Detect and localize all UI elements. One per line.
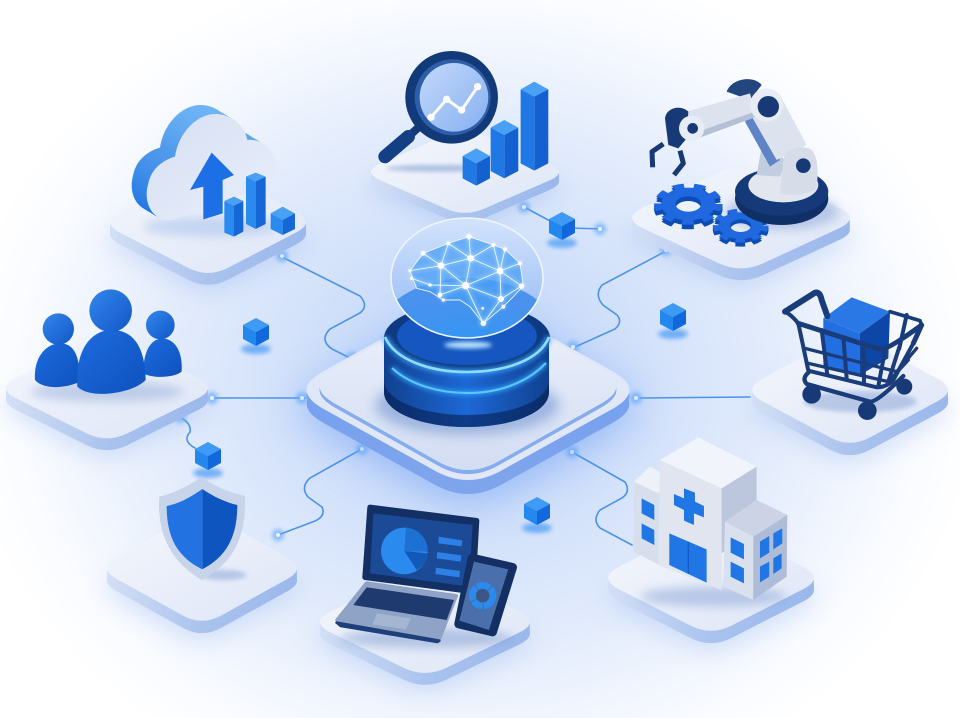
platform: robot [632, 168, 850, 287]
network brain [408, 234, 524, 326]
icon: laptop and tablet [337, 507, 513, 648]
floating cube: upper left [241, 318, 271, 354]
gears [658, 186, 765, 245]
icon: hospital [633, 437, 787, 607]
platform: analytics [371, 131, 559, 228]
icon: cloud upload with bars [132, 105, 295, 237]
central platform [302, 300, 634, 500]
icon: robot arm and gears [652, 79, 838, 245]
icon: people group [30, 289, 183, 402]
floating cube: bottom [522, 497, 552, 533]
platform: cart [752, 337, 948, 462]
platform: cloud [110, 171, 306, 292]
glass dome with brain [390, 217, 544, 339]
icon: shield [159, 477, 247, 580]
platform: shield [107, 515, 297, 640]
icon: shopping cart [785, 293, 922, 420]
floating cube: top [547, 212, 577, 248]
platform: people [6, 338, 208, 457]
icon: magnifier and bar chart [385, 51, 548, 186]
cylinder server base [375, 303, 559, 435]
connector lines [174, 201, 750, 545]
platform: laptop [320, 571, 530, 692]
platform: hospital [608, 525, 814, 650]
floating cube: left lower [193, 442, 223, 478]
floating cube: right [658, 303, 688, 339]
